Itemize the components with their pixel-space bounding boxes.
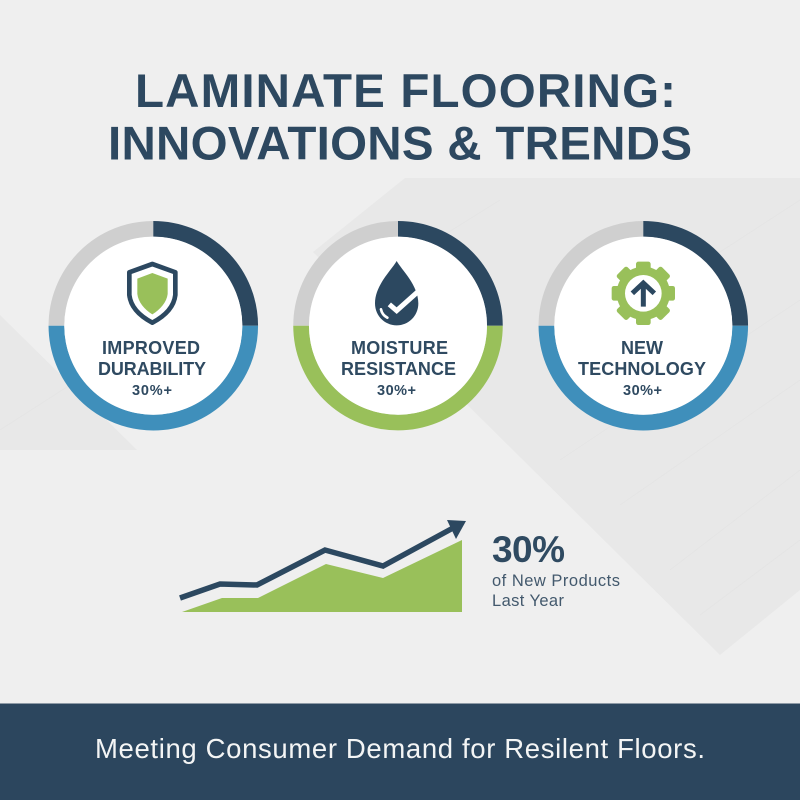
label: moisture resistance: RESISTANCE: [341, 359, 456, 379]
label: improved durability: [98, 338, 206, 399]
label: new technology: [578, 338, 706, 399]
callout: 30 percent of new products: of New Products: [492, 572, 620, 590]
callout: 30 percent of new products: 30%: [492, 529, 565, 570]
panel: improved durability: [56, 229, 250, 423]
title: LAMINATE FLOORING:: [135, 65, 676, 118]
callout: 30 percent of new products: Last Year: [492, 592, 564, 610]
label: new technology: NEW: [621, 338, 663, 358]
label: moisture resistance: 30%+: [377, 383, 416, 399]
label: improved durability: 30%+: [132, 383, 172, 399]
footer banner: Meeting Consumer Demand for Resilent Floors.: [95, 733, 705, 764]
title: INNOVATIONS & TRENDS: [108, 118, 692, 170]
ring chart: technology: [546, 229, 740, 423]
icon: water drop: [375, 261, 418, 325]
label: moisture resistance: MOISTURE: [351, 338, 448, 358]
label: improved durability: DURABILITY: [98, 359, 206, 379]
callout: 30 percent of new products: [492, 529, 620, 610]
label: moisture resistance: [341, 338, 456, 399]
label: improved durability: IMPROVED: [102, 338, 200, 358]
background panel: left triangle: [0, 315, 137, 450]
footer banner: [0, 704, 800, 800]
label: new technology: 30%+: [623, 383, 662, 399]
title: [108, 65, 692, 170]
icon: shield: [129, 264, 175, 323]
ring chart: durability: [56, 229, 250, 423]
panel: moisture resistance: [301, 229, 495, 423]
ring chart: moisture: [301, 229, 495, 423]
panel: new technology: [546, 229, 740, 423]
label: new technology: TECHNOLOGY: [578, 359, 706, 379]
chart: growth area with arrow: [180, 520, 466, 612]
background panel: right angled wood shape: [313, 178, 800, 655]
icon: gear with up arrow: [612, 262, 675, 325]
